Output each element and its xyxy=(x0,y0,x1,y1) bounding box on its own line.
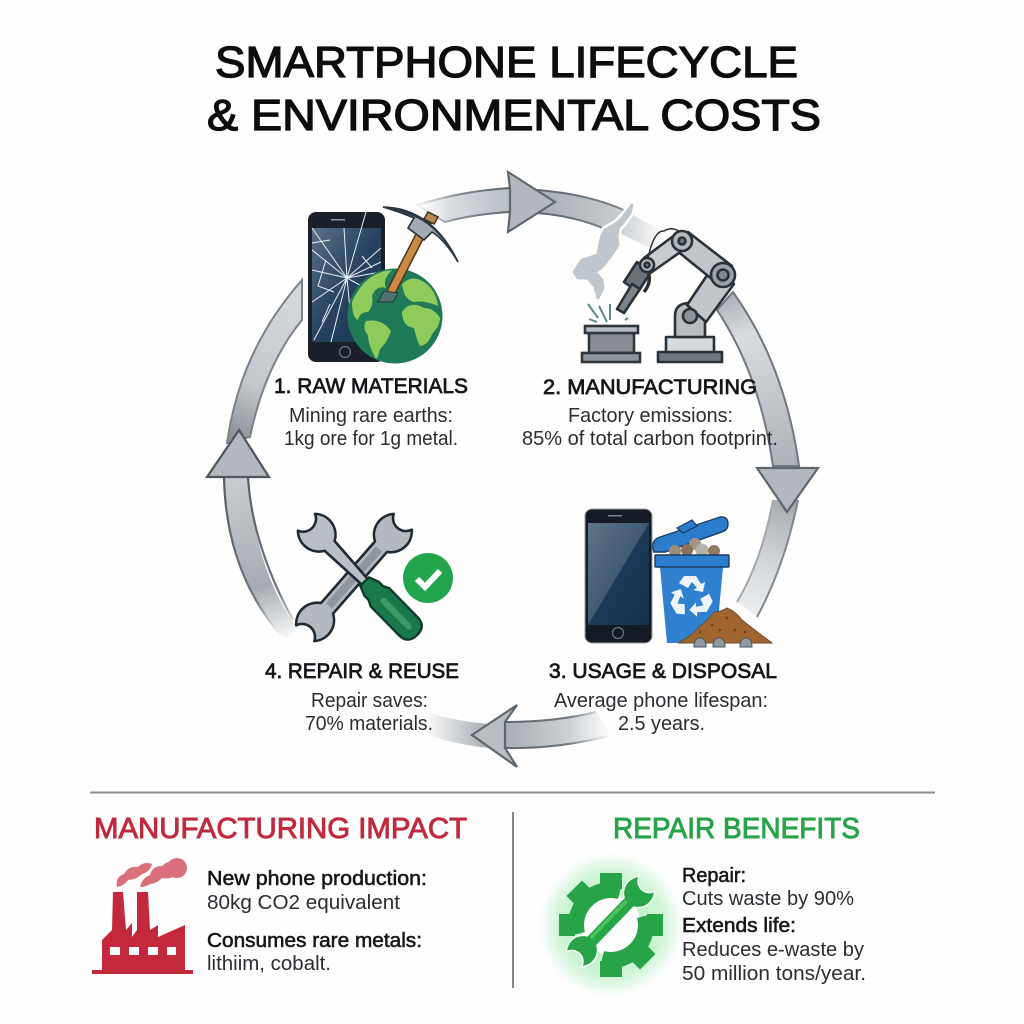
phone with cracked screen xyxy=(308,212,385,362)
label: step 2 manufacturing: 85% of total carbon footprint. xyxy=(522,427,778,450)
arrow: raw materials to manufacturing xyxy=(417,172,555,232)
title: & ENVIRONMENTAL COSTS xyxy=(207,91,821,140)
label: step 3 usage and disposal xyxy=(549,659,777,735)
arrow: repair to raw materials xyxy=(207,280,302,640)
label: step 2 manufacturing xyxy=(522,375,778,450)
text: repair facts: 50 million tons/year. xyxy=(682,962,866,985)
icon: phone, recycle bin and dirt pile xyxy=(585,509,772,647)
dirt pile xyxy=(678,608,772,647)
icon: cracked phone, globe and pickaxe xyxy=(308,207,458,364)
label: step 1 raw materials xyxy=(274,374,468,450)
label: step 2 manufacturing: Factory emissions: xyxy=(568,404,733,427)
label: step 3 usage and disposal: Average phone lifespan: xyxy=(554,689,768,712)
icon: gear with wrench xyxy=(539,853,683,997)
label: step 4 repair and reuse xyxy=(265,659,459,735)
panel: repair benefits xyxy=(539,813,866,997)
label: step 4 repair and reuse: 4. REPAIR & REUSE xyxy=(265,659,459,683)
text: repair facts: Repair: xyxy=(682,865,746,887)
recycle symbol xyxy=(666,576,715,620)
text: production facts: New phone production: xyxy=(207,868,427,890)
arrow: usage to repair xyxy=(423,705,612,767)
label: step 3 usage and disposal: 2.5 years. xyxy=(618,712,705,735)
globe xyxy=(348,268,442,364)
text: repair facts: Reduces e-waste by xyxy=(682,938,865,961)
icon: factory xyxy=(92,858,193,974)
label: step 4 repair and reuse: Repair saves: xyxy=(311,689,428,712)
arrow: manufacturing to usage xyxy=(537,190,818,617)
icon: crossed wrench and screwdriver with check xyxy=(292,510,453,648)
label: step 1 raw materials: 1kg ore for 1g metal. xyxy=(284,427,458,450)
sparks xyxy=(588,304,628,322)
text: production facts: Consumes rare metals: xyxy=(207,930,422,952)
robot arm xyxy=(617,229,735,362)
text: repair facts xyxy=(682,865,866,985)
green check badge xyxy=(403,553,453,603)
heading: manufacturing impact: MANUFACTURING IMPACT xyxy=(94,813,467,845)
label: step 3 usage and disposal: 3. USAGE & DISPOSAL xyxy=(549,659,777,683)
panel: manufacturing impact xyxy=(92,813,467,975)
intact phone xyxy=(585,509,652,643)
icon: factory smoke and robot arm xyxy=(574,205,735,362)
label: step 1 raw materials: 1. RAW MATERIALS xyxy=(274,374,468,398)
wrench xyxy=(292,510,416,645)
label: step 2 manufacturing: 2. MANUFACTURING xyxy=(543,375,757,399)
pickaxe xyxy=(378,207,458,302)
text: production facts xyxy=(207,868,427,975)
recycling bin xyxy=(653,517,729,643)
screwdriver with wrench head xyxy=(294,510,430,648)
text: production facts: lithiim, cobalt. xyxy=(207,952,331,975)
text: production facts: 80kg CO2 equivalent xyxy=(207,891,400,914)
smoke xyxy=(574,205,632,298)
title xyxy=(207,38,821,140)
label: step 4 repair and reuse: 70% materials. xyxy=(305,712,433,735)
text: repair facts: Extends life: xyxy=(682,915,796,937)
cycle arrows ring xyxy=(207,172,818,767)
heading: repair benefits: REPAIR BENEFITS xyxy=(613,813,860,845)
title: SMARTPHONE LIFECYCLE xyxy=(215,38,798,87)
press block xyxy=(582,326,640,362)
label: step 1 raw materials: Mining rare earths: xyxy=(289,404,453,427)
text: repair facts: Cuts waste by 90% xyxy=(682,887,854,910)
